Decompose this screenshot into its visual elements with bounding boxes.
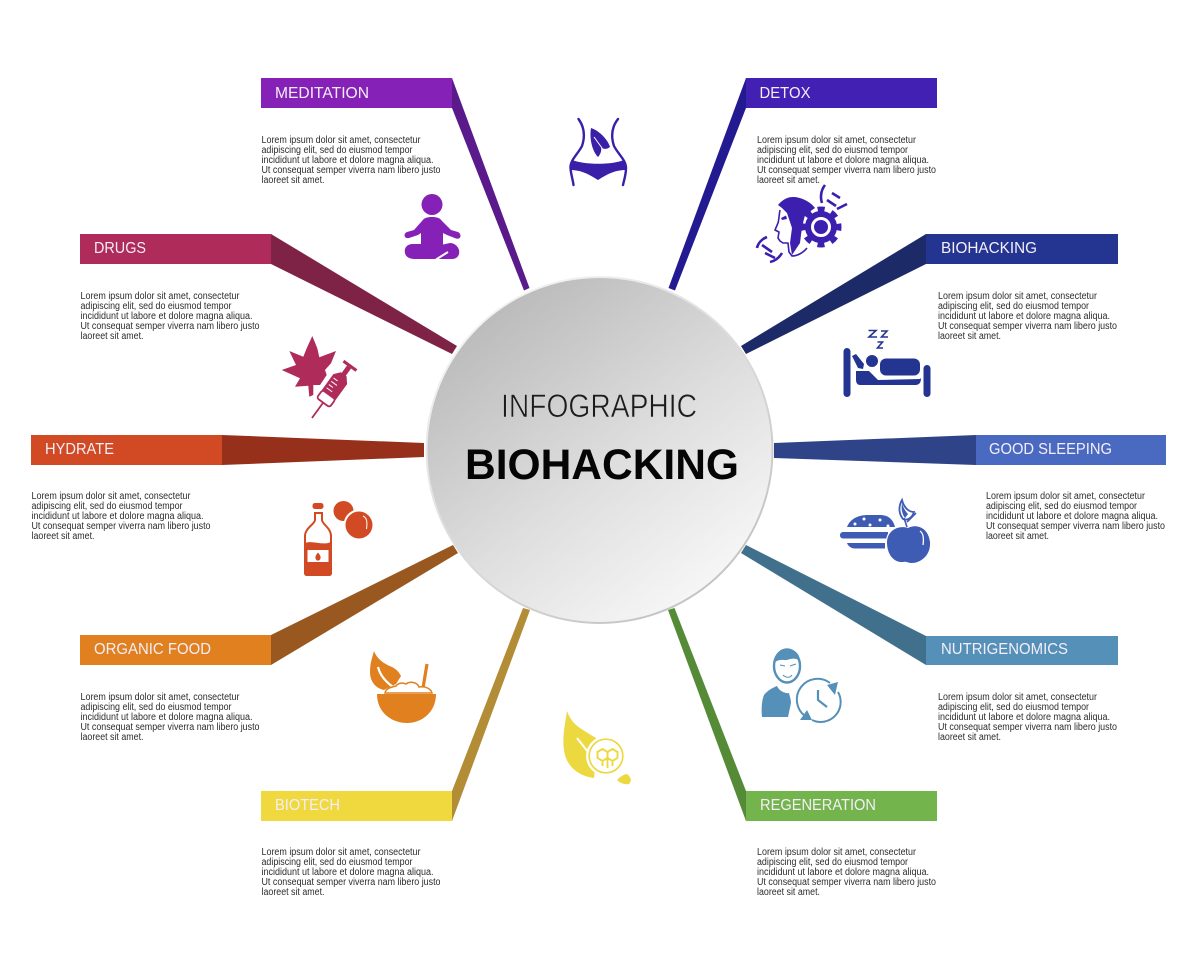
text block: biohacking [938, 291, 1117, 342]
spoke: biohacking [741, 234, 926, 354]
spoke: meditation [452, 78, 530, 290]
label: meditation: MEDITATION [275, 85, 369, 102]
text block: meditation [262, 135, 441, 186]
text block: detox: adipiscing elit, sed do eiusmod tempor [757, 145, 909, 156]
text block: meditation: incididunt ut labore et dolore magna aliqua. [262, 155, 434, 166]
icon: waist with leaf [570, 119, 626, 185]
panel: detox [570, 78, 937, 290]
icon: cannabis leaf and syringe [282, 336, 358, 424]
text block: biotech: Lorem ipsum dolor sit amet, consectetur [262, 847, 421, 858]
text block: hydrate: incididunt ut labore et dolore magna aliqua. [32, 511, 204, 522]
text block: biotech [262, 847, 441, 898]
banner: hydrate [31, 435, 222, 465]
panel: biohacking [741, 234, 1118, 397]
text block: biohacking: Lorem ipsum dolor sit amet, consectetur [938, 291, 1098, 302]
spoke: regeneration [668, 608, 746, 821]
heading: biohacking: BIOHACKING [465, 441, 739, 489]
banner: drugs [80, 234, 271, 264]
text block: nutrigenomics: Lorem ipsum dolor sit amet, consectetur [938, 692, 1098, 703]
label: organic food: ORGANIC FOOD [94, 641, 211, 658]
spoke: biotech [452, 608, 530, 821]
banner: regeneration [746, 791, 937, 821]
text block: nutrigenomics [938, 692, 1117, 743]
text block: detox: Ut consequat semper viverra nam libero justo [757, 165, 936, 176]
spoke: organic food [271, 545, 458, 665]
text block: regeneration: incididunt ut labore et dolore magna aliqua. [757, 867, 929, 878]
text block: biohacking: incididunt ut labore et dolore magna aliqua. [938, 311, 1110, 322]
panel: nutrigenomics [741, 545, 1118, 743]
text block: detox: incididunt ut labore et dolore magna aliqua. [757, 155, 929, 166]
icon: bottle and pills [305, 501, 374, 575]
text block: biohacking: laoreet sit amet. [938, 331, 1001, 342]
text block: drugs: laoreet sit amet. [80, 331, 144, 342]
icon: meditating person [405, 194, 460, 260]
text block: biotech: incididunt ut labore et dolore magna aliqua. [262, 867, 434, 878]
text block: good sleeping: Lorem ipsum dolor sit amet, consectetur [986, 491, 1146, 502]
icon: face with gear and dna [757, 185, 847, 262]
text block: drugs: Ut consequat semper viverra nam libero justo [80, 321, 260, 332]
banner: biotech [261, 791, 452, 821]
text block: organic food [80, 692, 260, 743]
text block: hydrate: Ut consequat semper viverra nam libero justo [32, 521, 211, 532]
icon: person sleeping in bed [844, 330, 930, 397]
spoke: detox [668, 78, 746, 290]
text block: good sleeping: incididunt ut labore et dolore magna aliqua. [986, 511, 1158, 522]
label: hydrate: HYDRATE [45, 441, 114, 458]
banner: meditation [261, 78, 452, 108]
text block: good sleeping: Ut consequat semper viverra nam libero justo [986, 521, 1165, 532]
text block: organic food: laoreet sit amet. [80, 732, 144, 743]
panel: drugs [80, 234, 457, 424]
label: regeneration: REGENERATION [760, 797, 876, 814]
text block: good sleeping: adipiscing elit, sed do eiusmod tempor [986, 501, 1138, 512]
text block: regeneration: adipiscing elit, sed do eiusmod tempor [757, 857, 909, 868]
label: drugs: DRUGS [94, 240, 146, 257]
text block: nutrigenomics: incididunt ut labore et dolore magna aliqua. [938, 712, 1110, 723]
text block: drugs: Lorem ipsum dolor sit amet, consectetur [80, 291, 240, 302]
panel: meditation [261, 78, 530, 290]
text block: nutrigenomics: Ut consequat semper viverra nam libero justo [938, 722, 1117, 733]
text block: nutrigenomics: adipiscing elit, sed do eiusmod tempor [938, 702, 1090, 713]
text block: organic food: Lorem ipsum dolor sit amet, consectetur [80, 692, 240, 703]
text block: detox: laoreet sit amet. [757, 175, 820, 186]
text block: meditation: Lorem ipsum dolor sit amet, consectetur [262, 135, 421, 146]
text block: detox: Lorem ipsum dolor sit amet, consectetur [757, 135, 917, 146]
text block: nutrigenomics: laoreet sit amet. [938, 732, 1001, 743]
spoke: hydrate [222, 435, 424, 465]
banner: nutrigenomics [926, 636, 1118, 665]
spoke: nutrigenomics [741, 545, 926, 665]
spoke: good sleeping [774, 435, 976, 465]
text block: meditation: Ut consequat semper viverra nam libero justo [262, 165, 441, 176]
text block: biotech: adipiscing elit, sed do eiusmod tempor [262, 857, 413, 868]
text block: hydrate: Lorem ipsum dolor sit amet, consectetur [32, 491, 191, 502]
panel: biotech [261, 608, 631, 898]
text block: biotech: Ut consequat semper viverra nam libero justo [262, 877, 441, 888]
text block: hydrate: adipiscing elit, sed do eiusmod tempor [32, 501, 183, 512]
text block: hydrate: laoreet sit amet. [32, 531, 94, 542]
text block: drugs: adipiscing elit, sed do eiusmod tempor [80, 301, 232, 312]
text block: regeneration: Lorem ipsum dolor sit amet, consectetur [757, 847, 917, 858]
panel: regeneration [668, 608, 937, 898]
label: biohacking: BIOHACKING [941, 240, 1037, 257]
text block: meditation: adipiscing elit, sed do eiusmod tempor [262, 145, 413, 156]
text block: drugs: incididunt ut labore et dolore magna aliqua. [80, 311, 252, 322]
text block: meditation: laoreet sit amet. [262, 175, 324, 186]
label: nutrigenomics: NUTRIGENOMICS [941, 641, 1068, 658]
text block: detox [757, 135, 936, 186]
text block: regeneration: laoreet sit amet. [757, 887, 820, 898]
text block: good sleeping: laoreet sit amet. [986, 531, 1049, 542]
text block: organic food: Ut consequat semper viverra nam libero justo [80, 722, 260, 733]
banner: detox [746, 78, 937, 108]
text block: organic food: incididunt ut labore et dolore magna aliqua. [80, 712, 252, 723]
text block: biohacking: adipiscing elit, sed do eiusmod tempor [938, 301, 1090, 312]
text block: regeneration: Ut consequat semper viverra nam libero justo [757, 877, 936, 888]
panel: hydrate [31, 435, 424, 575]
spoke: drugs [271, 234, 457, 354]
banner: biohacking [926, 234, 1118, 264]
icon: burger and apple [840, 500, 930, 563]
text block: hydrate [32, 491, 211, 542]
central disc [426, 276, 774, 624]
icon: bowl with leaf [370, 651, 436, 723]
text block: biohacking: Ut consequat semper viverra nam libero justo [938, 321, 1117, 332]
label: detox: DETOX [760, 85, 811, 102]
banner: good sleeping [976, 435, 1166, 465]
icon: man with clock [762, 649, 841, 722]
text block: drugs [80, 291, 260, 342]
panel: organic food [80, 545, 458, 743]
label: good sleeping: GOOD SLEEPING [989, 441, 1112, 458]
text block: regeneration [757, 847, 936, 898]
text block: biotech: laoreet sit amet. [262, 887, 324, 898]
panel: good sleeping [774, 435, 1166, 563]
text block: organic food: adipiscing elit, sed do eiusmod tempor [80, 702, 232, 713]
label: biotech: BIOTECH [275, 797, 340, 814]
banner: organic food [80, 635, 271, 665]
icon: leaf with honeycomb [563, 711, 631, 784]
heading: infographic: INFOGRAPHIC [501, 388, 697, 424]
text block: good sleeping [986, 491, 1165, 542]
